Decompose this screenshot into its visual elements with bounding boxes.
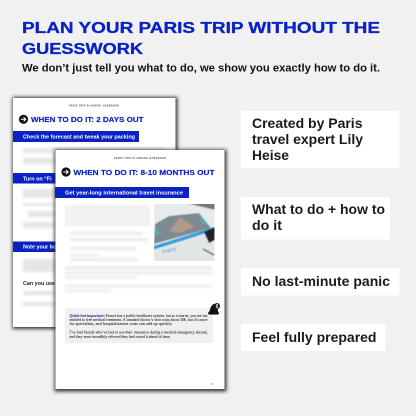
section bar: insurance: Get year-long international travel insurance <box>65 191 183 197</box>
section bar: turn on <box>13 173 176 184</box>
page heading: WHEN TO DO IT: 8-10 MONTHS OUT <box>74 168 215 177</box>
section bar: forecast <box>13 131 139 142</box>
callout box: Quick but important: France has a public healthcare system, but as a tourist, you are not <box>70 314 208 319</box>
blurred body text <box>65 205 212 292</box>
callout box: and they were incredibly relieved they had sorted it ahead of time. <box>70 335 171 339</box>
title: PLAN YOUR PARIS TRIP WITHOUT THE <box>22 20 380 37</box>
section bar: forecast: Check the forecast and tweak your packing <box>23 134 135 140</box>
page header: PARIS TRIP PLANNING HANDBOOK <box>69 104 119 108</box>
image: travel insurance policy photo <box>154 203 216 262</box>
benefit: feel prepared <box>241 324 386 351</box>
blurred text block <box>23 291 57 306</box>
benefit: created by expert: Heise <box>252 148 289 163</box>
benefit: feel prepared: Feel fully prepared <box>252 330 376 345</box>
benefit: created by expert <box>241 111 400 168</box>
benefit: what to do <box>241 197 390 240</box>
image caption: Policy <box>162 246 178 256</box>
page number: 9 <box>211 382 213 386</box>
icon: arrow circle <box>61 167 71 177</box>
icon: bell with badge <box>208 303 220 314</box>
page heading: WHEN TO DO IT: 2 DAYS OUT <box>31 117 144 124</box>
benefit: created by expert: Created by Paris <box>252 116 363 131</box>
section bar: turn on: Turn on “Fi <box>23 176 52 182</box>
benefit: what to do: do it <box>252 218 282 233</box>
page header: PARIS TRIP PLANNING HANDBOOK <box>114 157 166 160</box>
callout box: entitled to free medical treatment. A standard doctor’s visit costs about 30€, but it’s more <box>70 318 208 323</box>
panel: back handbook page, 2 days out <box>12 97 178 329</box>
blurred text block <box>23 189 58 228</box>
benefit: what to do: What to do + how to <box>252 202 385 217</box>
subheading: Can you use <box>23 281 55 287</box>
icon: arrow circle <box>19 115 28 124</box>
panel: front handbook page, 8-10 months out <box>54 150 226 392</box>
title: GUESSWORK <box>22 41 144 58</box>
section bar: note <box>13 242 176 252</box>
callout box: for specialists, and hospitalization costs can add up quickly. <box>70 322 173 327</box>
benefit: no panic <box>241 268 400 296</box>
subtitle: We don’t just tell you what to do, we show you exactly how to do it. <box>22 62 380 74</box>
section bar: insurance <box>55 187 189 198</box>
title <box>22 20 380 58</box>
callout box <box>65 308 213 343</box>
benefit: created by expert: travel expert Lily <box>252 132 363 147</box>
image caption: Travel Insurance <box>161 232 198 249</box>
benefit: no panic: No last-minute panic <box>252 274 390 289</box>
section bar: note: Note your ho <box>23 244 57 250</box>
callout box: I’ve had friends who’ve had to use their insurance during a medical emergency abroad, <box>70 331 208 336</box>
blurred text block <box>23 259 57 272</box>
blurred text block <box>23 148 165 164</box>
image caption <box>161 234 197 254</box>
